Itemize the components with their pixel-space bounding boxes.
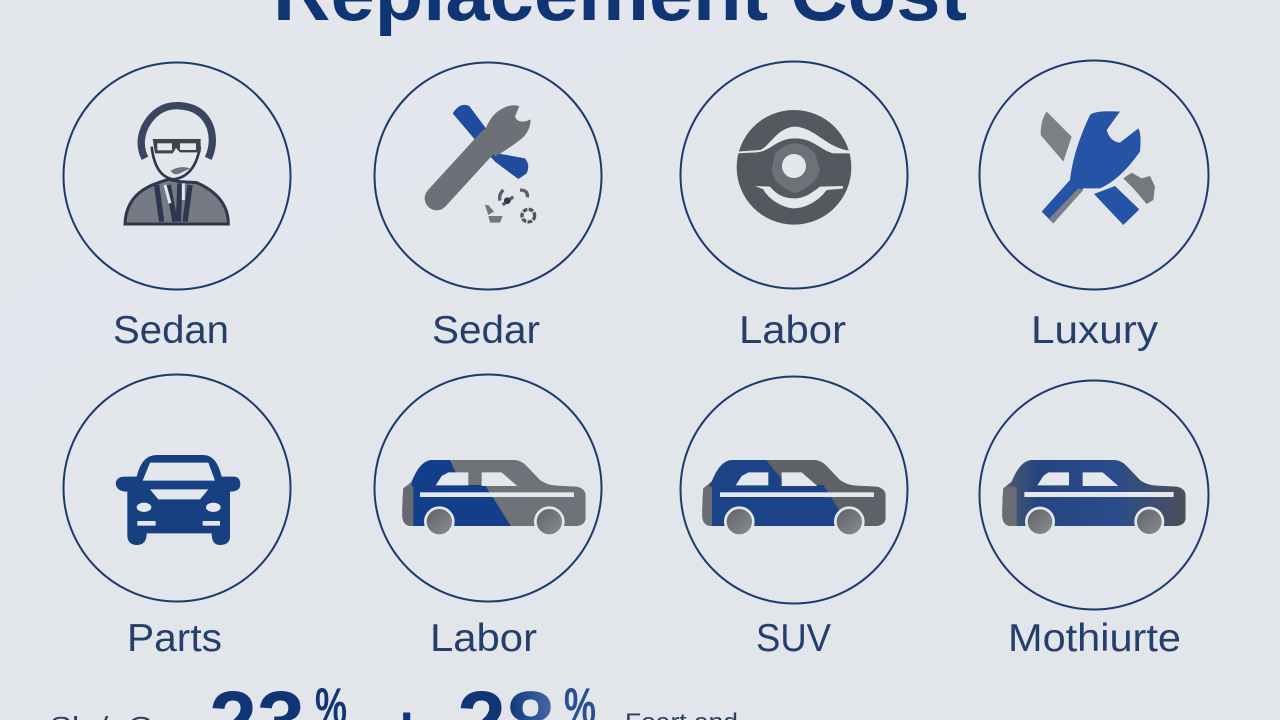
icon: side car suv bbox=[700, 457, 890, 536]
icon: car front bbox=[116, 455, 240, 545]
panel: labor car bbox=[374, 374, 602, 660]
icon: person with headset bbox=[125, 106, 228, 224]
label: sedar: Sedar bbox=[432, 309, 540, 352]
label: suv: SUV bbox=[756, 617, 831, 660]
stat: 28 percent bbox=[457, 674, 596, 720]
panel: sedan person bbox=[64, 62, 290, 352]
label: luxury: Luxury bbox=[1031, 309, 1159, 352]
label: parts: Parts bbox=[127, 617, 222, 660]
panel: sedar tools bbox=[374, 62, 602, 352]
panel: labor wheel bbox=[680, 62, 908, 352]
label: mothiurte: Mothiurte bbox=[1008, 617, 1181, 660]
icon: wrench and screwdriver with debris bbox=[437, 105, 535, 223]
panel: parts car bbox=[64, 374, 290, 660]
label: labor: Labor bbox=[430, 617, 537, 660]
panel: mothiurte car bbox=[980, 380, 1208, 660]
icon: blue wrench and grey tools bbox=[1041, 111, 1155, 225]
label: labor: Labor bbox=[739, 309, 846, 352]
panel: luxury tools bbox=[980, 60, 1208, 352]
icon: side car navy bbox=[1000, 457, 1190, 535]
icon: side car blue and grey bbox=[400, 457, 590, 536]
panel: suv car bbox=[680, 376, 908, 660]
label: sedan: Sedan bbox=[113, 309, 229, 352]
icon: brake disc bbox=[737, 110, 851, 225]
